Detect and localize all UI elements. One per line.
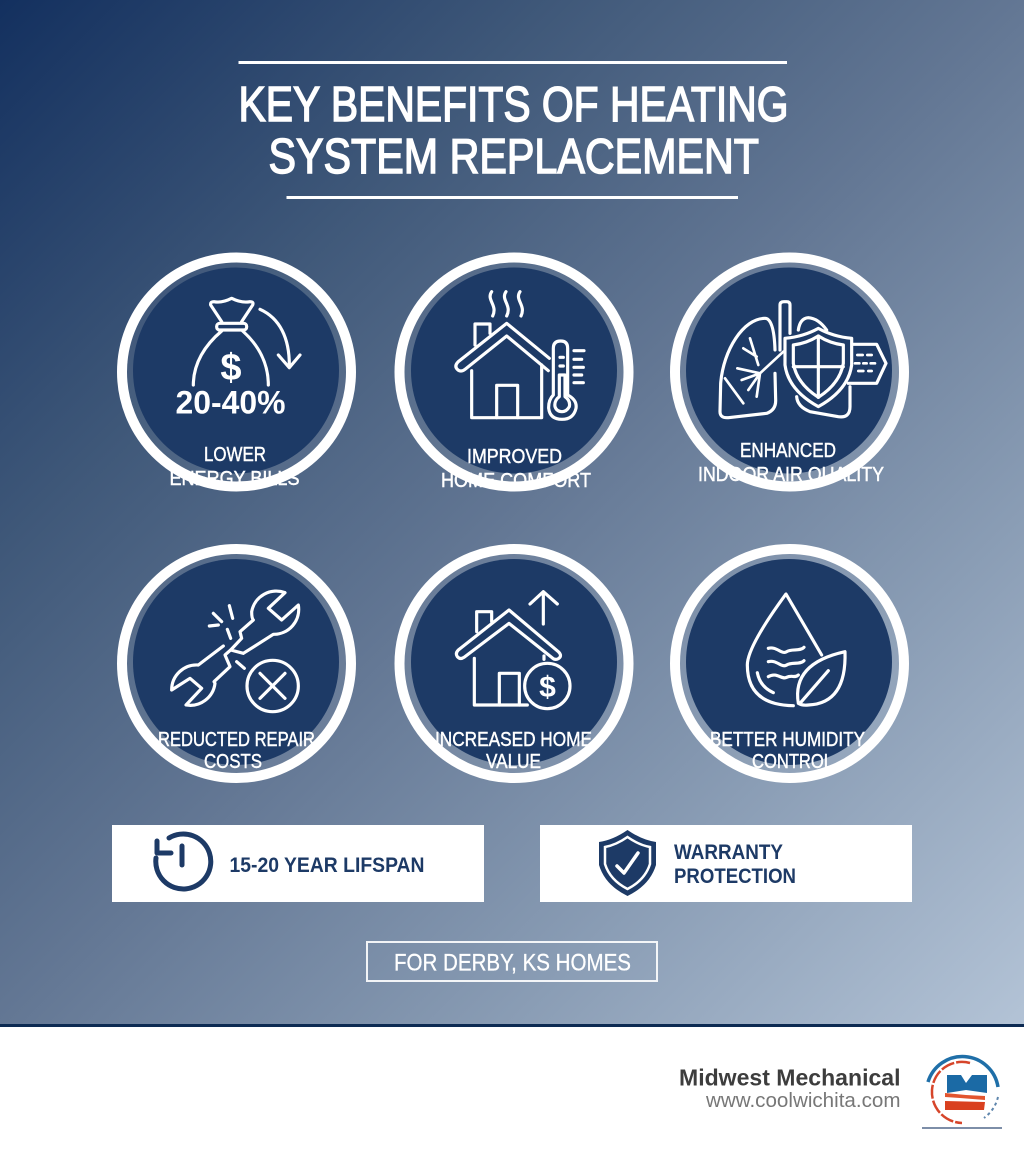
panel: enhanced indoor air quality: ENHANCED [740,439,836,462]
icon: broken wrench with x mark [172,591,299,712]
card: warranty: WARRANTY [674,840,783,864]
icon: house with arrow and dollar [456,592,570,709]
panel: increased home value: INCREASED HOME [435,728,592,751]
panel: enhanced indoor air quality: INDOOR AIR QUALITY [698,463,884,486]
footer company name and url: Midwest Mechanical [679,1064,900,1090]
panel: lower energy bills: $ [220,347,242,389]
panel: reduced repair costs [122,549,351,778]
icon: house with thermometer [456,292,584,419]
panel: reduced repair costs: REDUCTED REPAIR [158,728,315,751]
panel: better humidity control [675,549,904,778]
icon: lungs with shield and filter [720,302,886,418]
card: lifespan [112,825,484,902]
logo: Midwest Mechanical [922,1057,1002,1129]
panel: better humidity control: BETTER HUMIDITY [710,728,865,751]
footer bar [0,1024,1024,1154]
panel: increased home value [400,549,628,778]
panel: improved home comfort: IMPROVED [467,445,562,468]
panel: increased home value: VALUE [486,750,541,773]
panel: improved home comfort: HOME COMFORT [441,469,591,492]
panel: increased home value: $ [539,671,556,704]
panel: lower energy bills: 20-40% [176,384,286,420]
footer company name and url [679,1064,900,1112]
title block: SYSTEM REPLACEMENT [268,130,759,184]
icon: money bag with down arrow [193,298,300,385]
location badge [367,942,657,981]
panel: enhanced indoor air quality [675,258,904,486]
card: lifespan: 15-20 YEAR LIFSPAN [230,853,424,877]
panel: lower energy bills: ENERGY BILLS [170,467,300,490]
title block: KEY BENEFITS OF HEATING [238,78,788,132]
footer company name and url: www.coolwichita.com [705,1090,900,1112]
card: warranty: PROTECTION [674,864,796,888]
location badge: FOR DERBY, KS HOMES [394,950,631,976]
icon: water drop and leaf [747,594,845,706]
panel: improved home comfort [400,258,628,492]
panel: lower energy bills: LOWER [204,443,266,466]
card: warranty [540,825,912,902]
icon: shield with check [599,830,656,896]
title block [238,61,788,199]
panel: better humidity control: CONTROL [752,750,833,773]
panel: lower energy bills [122,258,351,490]
icon: clock with return arrow [156,834,211,889]
panel: reduced repair costs: COSTS [204,750,262,773]
